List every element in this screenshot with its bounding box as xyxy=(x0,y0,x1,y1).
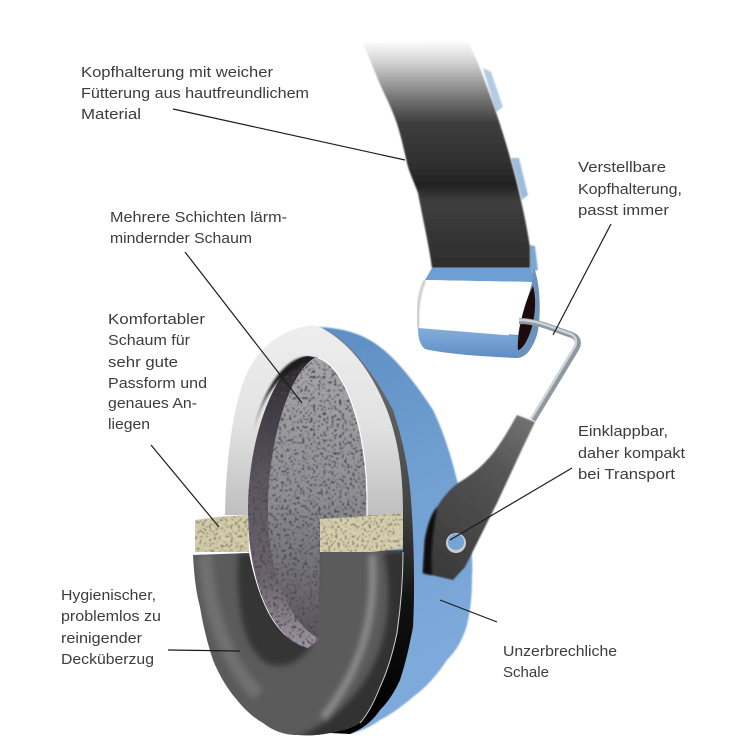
icon: adjustable slider loop xyxy=(418,268,540,358)
text: hygienic cover: Hygienischer, xyxy=(61,587,156,604)
icon: dark rim xyxy=(318,327,414,734)
text: foam layers: Mehrere Schichten lärm- xyxy=(110,209,287,226)
callout line: foldable xyxy=(450,468,572,540)
text: comfort foam: Schaum für xyxy=(108,332,190,349)
text: unbreakable shell: Schale xyxy=(503,664,549,681)
icon: headband padding xyxy=(363,40,538,272)
icon: blue outer shell xyxy=(318,327,472,734)
text: adjustable headband: Kopfhalterung, xyxy=(578,181,682,198)
text: foldable: daher kompakt xyxy=(578,445,686,462)
callout line: comfort foam xyxy=(151,445,219,527)
text: headband padding: Fütterung aus hautfreundlichem xyxy=(81,85,309,102)
icon: folding arm xyxy=(423,415,535,580)
text: hygienic cover xyxy=(61,587,161,668)
callout line: headband xyxy=(173,109,405,160)
icon: white sealing ring xyxy=(225,325,403,515)
text: adjustable headband: passt immer xyxy=(578,202,669,219)
callout line: adjustable xyxy=(553,224,611,335)
text: foldable xyxy=(578,423,686,483)
text: adjustable headband xyxy=(578,159,682,219)
text: unbreakable shell: Unzerbrechliche xyxy=(503,643,617,660)
text: foam layers xyxy=(110,209,287,247)
text: comfort foam: liegen xyxy=(108,416,150,433)
text: hygienic cover: reinigender xyxy=(61,630,142,647)
text: foldable: Einklappbar, xyxy=(578,423,668,440)
text: comfort foam: Passform und xyxy=(108,375,207,392)
text: unbreakable shell xyxy=(503,643,617,681)
text: adjustable headband: Verstellbare xyxy=(578,159,666,176)
icon: noise-reducing foam xyxy=(248,356,367,652)
text: comfort foam: sehr gute xyxy=(108,354,178,371)
icon: comfort foam block right xyxy=(320,513,403,552)
text: headband padding: Material xyxy=(81,106,141,123)
panel: earmuff illustration xyxy=(193,40,578,740)
icon: adjustable wire xyxy=(519,320,578,420)
icon: comfort foam block left xyxy=(195,515,249,552)
callout line: shell xyxy=(440,600,497,622)
text: comfort foam xyxy=(108,311,207,433)
text: foam layers: mindernder Schaum xyxy=(110,230,252,247)
text: foldable: bei Transport xyxy=(578,466,676,483)
icon: grey cover cushion xyxy=(193,550,420,740)
text: headband padding xyxy=(81,64,309,123)
text: comfort foam: Komfortabler xyxy=(108,311,205,328)
text: headband padding: Kopfhalterung mit weicher xyxy=(81,64,273,81)
text: hygienic cover: problemlos zu xyxy=(61,608,161,625)
callout line: cover xyxy=(168,650,240,651)
text: comfort foam: genaues An- xyxy=(108,395,197,412)
text: hygienic cover: Decküberzug xyxy=(61,651,154,668)
callout line: foam layers xyxy=(185,252,302,403)
